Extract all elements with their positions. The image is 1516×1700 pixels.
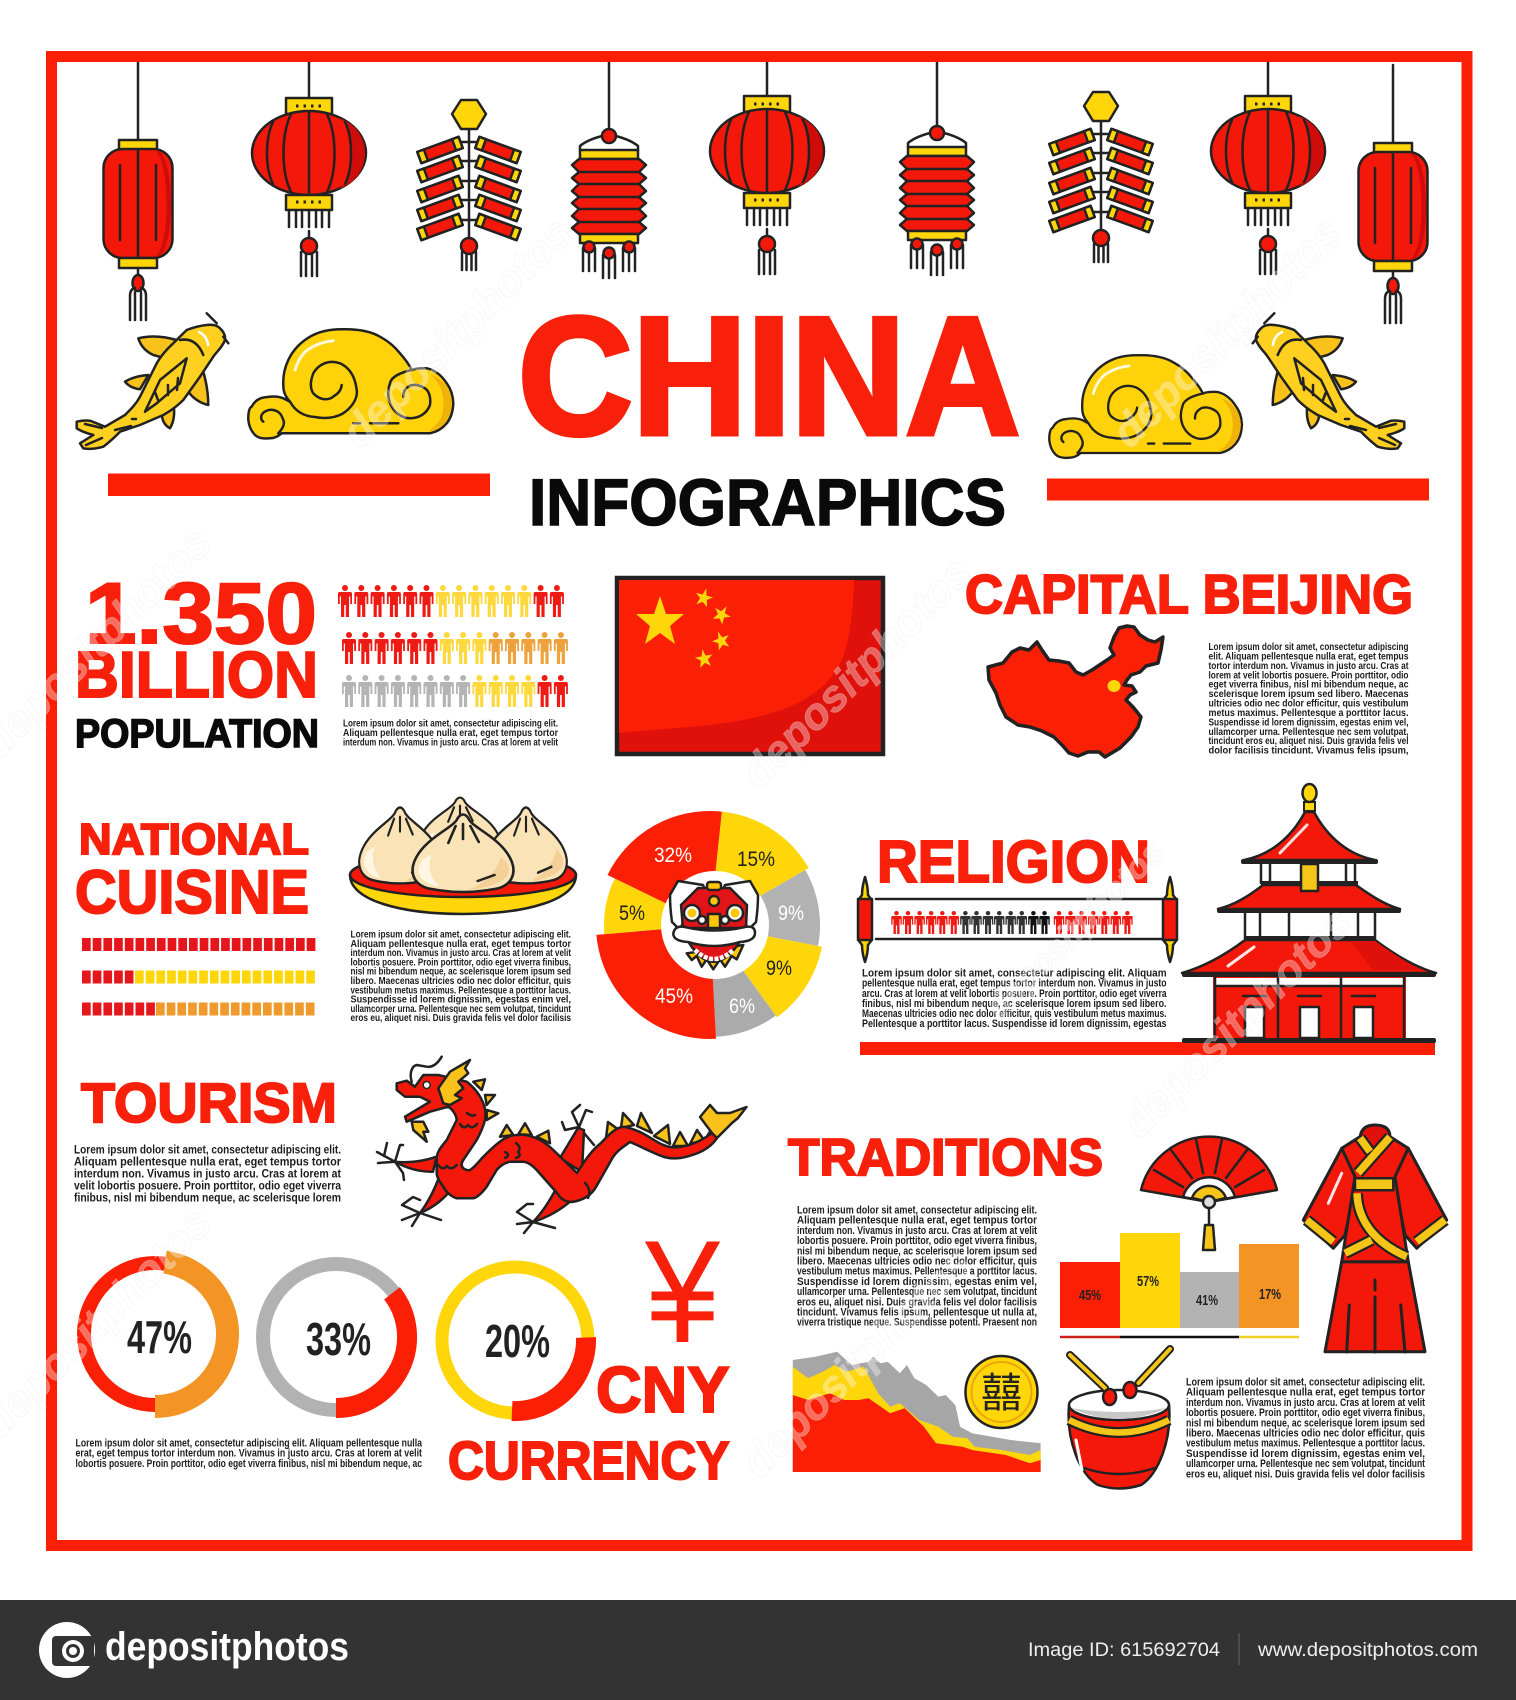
ring 47%	[84, 1262, 228, 1407]
donut labels: 9%	[766, 957, 792, 980]
drum text: Lorem ipsum dolor sit amet, consectetur adipiscing elit.	[1186, 1376, 1425, 1388]
cuisine text: eros eu, aliquet nisi. Duis gravida felis vel dolor facilisis	[350, 1013, 571, 1024]
traditions text: ullamcorper urna. Pellentesque nec sem volutpat, tincidunt	[797, 1286, 1037, 1298]
cuisine text: lobortis posuere. Proin porttitor, odio eget viverra finibus,	[350, 957, 571, 968]
icon: tall lantern right	[1358, 65, 1428, 323]
bar 17%	[1239, 1244, 1299, 1328]
icon: paper lantern left	[572, 62, 646, 278]
stock watermarks: depositphotos	[1102, 208, 1351, 457]
rings text: erat, eget tempus tortor interdum non. Vivamus in justo arcu. Cras at lorem at velit	[76, 1448, 422, 1460]
red layer	[793, 1393, 1041, 1472]
tourism text: Lorem ipsum dolor sit amet, consectetur adipiscing elit.	[74, 1142, 341, 1156]
drum text	[1186, 1376, 1426, 1480]
bar chart	[1060, 1233, 1299, 1337]
donut labels: 9%	[778, 902, 804, 925]
footer bar	[0, 1600, 1516, 1700]
tourism text: Aliquam pellentesque nulla erat, eget tempus tortor	[74, 1154, 341, 1168]
beijing marker	[1108, 680, 1120, 692]
scroll with pictograms	[858, 877, 1177, 962]
drum text: interdum non. Vivamus in justo arcu. Cras at lorem at velit	[1186, 1397, 1425, 1409]
pictogram row 1	[338, 585, 564, 617]
stock watermarks: depositphotos	[1112, 898, 1361, 1147]
tourism text: finibus, nisl mi bibendum neque, ac scelerisque lorem	[74, 1190, 341, 1204]
bar labels: 17%	[1259, 1286, 1281, 1303]
icon: tall lantern left	[104, 62, 172, 320]
religion text: Lorem ipsum dolor sit amet, consectetur adipiscing elit. Aliquam	[862, 968, 1167, 980]
drum text: Aliquam pellentesque nulla erat, eget tempus tortor	[1186, 1387, 1426, 1399]
drum text: nisl mi bibendum neque, ac scelerisque lorem ipsum sed	[1186, 1417, 1425, 1429]
stock watermarks: depositphotos	[732, 1238, 981, 1487]
icon: paper lantern right	[900, 59, 974, 275]
traditions text: vestibulum metus maximus. Pellentesque a porttitor lacus.	[797, 1266, 1037, 1278]
traditions text: viverra tristique neque. Suspendisse potenti. Praesent non	[797, 1317, 1037, 1329]
area chart	[793, 1352, 1041, 1472]
cuisine text: ullamcorper urna. Pellentesque nec sem volutpat, tincidunt	[350, 1004, 572, 1015]
icon: fan	[1141, 1137, 1277, 1250]
drum text: vestibulum metus maximus. Pellentesque a porttitor lacus.	[1186, 1438, 1425, 1450]
tourism text: interdum non. Vivamus in justo arcu. Cras at lorem at	[74, 1166, 341, 1180]
cuisine heading line 1: NATIONAL	[79, 815, 309, 864]
population label: POPULATION	[75, 712, 319, 756]
capital text: Suspendisse id lorem dignissim, egestas enim vel,	[1208, 717, 1409, 728]
icon: dumplings	[350, 798, 576, 914]
slice 5%	[604, 878, 710, 934]
bar labels: 45%	[1079, 1287, 1101, 1304]
donut labels: 32%	[654, 844, 692, 867]
ring 20%: 20%	[485, 1315, 550, 1367]
capital text: tincidunt eros eu, aliquet nisi. Duis gravida felis vel	[1208, 736, 1409, 747]
panel: tourism	[74, 1057, 746, 1233]
slice 9% yellow	[710, 925, 822, 1017]
title: CHINA: CHINA	[518, 282, 1020, 470]
bar 45%	[1060, 1262, 1120, 1328]
footer url: www.depositphotos.com	[1257, 1640, 1478, 1661]
population text: interdum non. Vivamus in justo arcu. Cras at lorem at velit	[343, 738, 559, 748]
religion text: finibus, nisl mi bibendum neque, ac scelerisque lorem ipsum sed libero.	[862, 998, 1166, 1010]
currency heading: CURRENCY	[448, 1431, 730, 1491]
traditions text: Lorem ipsum dolor sit amet, consectetur adipiscing elit.	[797, 1204, 1037, 1216]
tourism text: velit lobortis posuere. Proin porttitor, odio eget viverra	[74, 1178, 341, 1192]
icon: robe	[1303, 1125, 1447, 1352]
progress bar 2	[82, 970, 316, 984]
bar labels: 41%	[1196, 1292, 1218, 1309]
tourism text	[74, 1142, 341, 1204]
traditions text: Suspendisse id lorem dignissim, egestas enim vel,	[797, 1276, 1037, 1288]
donut labels: 6%	[729, 995, 755, 1018]
footer divider	[1238, 1633, 1240, 1665]
capital text: lorem at velit lobortis posuere. Proin porttitor, odio	[1208, 670, 1408, 681]
population text: Lorem ipsum dolor sit amet, consectetur adipiscing elit.	[343, 718, 558, 730]
cuisine text: Suspendisse id lorem dignissim, egestas enim vel,	[350, 995, 571, 1006]
ring 20%	[442, 1267, 588, 1413]
panel: population	[75, 566, 568, 756]
population text: Aliquam pellentesque nulla erat, eget tempus tortor	[343, 728, 558, 739]
icon: temple	[1182, 784, 1436, 1043]
ring 47%: 47%	[127, 1311, 192, 1363]
religion baseline bar	[860, 1042, 1435, 1055]
slice 9% gray	[710, 870, 820, 946]
cuisine text: nisl mi bibendum neque, ac scelerisque lorem ipsum sed	[350, 967, 571, 978]
donut labels: 15%	[737, 848, 775, 871]
religion text: Pellentesque a porttitor lacus. Suspendisse id lorem dignissim, egestas	[862, 1018, 1166, 1030]
bar labels: 57%	[1137, 1273, 1159, 1290]
traditions text: Aliquam pellentesque nulla erat, eget tempus tortor	[797, 1215, 1038, 1227]
drum text: lobortis posuere. Proin porttitor, odio eget viverra finibus,	[1186, 1407, 1425, 1419]
population number: 1.350	[85, 566, 317, 662]
icon: round lantern 1	[252, 62, 366, 276]
cuisine text: Lorem ipsum dolor sit amet, consectetur adipiscing elit.	[350, 930, 571, 940]
slice 45%	[596, 925, 716, 1039]
capital text: ultricies odio nec dolor efficitur, quis vestibulum	[1208, 698, 1409, 710]
lanterns row	[104, 59, 1428, 323]
slice 15%	[710, 812, 809, 925]
drum text: eros eu, aliquet nisi. Duis gravida felis vel dolor facilisis	[1186, 1468, 1425, 1480]
capital text: ullamcorper urna. Pellentesque nec sem volutpat,	[1208, 727, 1409, 738]
icon: drum	[1069, 1349, 1170, 1488]
traditions text	[797, 1204, 1038, 1329]
religion text: Maecenas ultricies odio nec dolor efficitur, quis vestibulum metus maximus.	[862, 1008, 1166, 1020]
icon: coin	[966, 1356, 1038, 1428]
cuisine text: interdum non. Vivamus in justo arcu. Cras at lorem at velit	[350, 948, 572, 959]
subtitle: INFOGRAPHICS: INFOGRAPHICS	[529, 465, 1006, 539]
ring 33%	[263, 1264, 409, 1410]
capital text: metus maximus. Pellentesque a porttitor lacus.	[1208, 708, 1409, 719]
panel: capital	[965, 563, 1413, 757]
cuisine heading line 2: CUISINE	[75, 858, 309, 926]
panel: national cuisine	[75, 798, 576, 1024]
drum text: ullamcorper urna. Pellentesque nec sem volutpat, tincidunt	[1186, 1458, 1425, 1470]
population unit: BILLION	[75, 638, 318, 711]
CNY label: CNY	[596, 1353, 730, 1426]
icon: coin: 囍	[981, 1359, 1022, 1419]
stock watermarks: depositphotos	[332, 208, 581, 457]
footer logo	[39, 1622, 95, 1678]
capital text: Lorem ipsum dolor sit amet, consectetur adipiscing	[1208, 642, 1408, 653]
china map	[988, 626, 1163, 757]
slice 6%	[710, 925, 776, 1037]
population text	[343, 718, 559, 748]
title rule left	[108, 474, 490, 496]
rings text: lobortis posuere. Proin porttitor, odio eget viverra finibus, nisl mi bibendum neque, ac	[76, 1458, 422, 1470]
gray layer	[793, 1352, 1041, 1472]
icon: cloud right	[1049, 355, 1242, 458]
pictogram row 2	[342, 632, 568, 664]
icon: firecrackers right	[1049, 92, 1153, 262]
footer image id: Image ID: 615692704	[1028, 1640, 1220, 1661]
ring 33%: 33%	[306, 1313, 371, 1365]
icon: round lantern 3	[1211, 60, 1325, 274]
donut labels: 5%	[619, 902, 645, 925]
tourism heading: TOURISM	[81, 1071, 337, 1134]
progress bar 3	[82, 1002, 316, 1016]
panel: religion	[858, 784, 1436, 1055]
icon: round lantern 2	[710, 60, 824, 274]
rings text	[76, 1438, 423, 1470]
capital text: scelerisque lorem ipsum sed libero. Maecenas	[1208, 689, 1409, 700]
capital text: eget viverra finibus, nisl mi bibendum neque, ac	[1208, 680, 1409, 691]
religion text	[862, 968, 1167, 1030]
stock watermarks	[0, 208, 1361, 1487]
title rule right	[1047, 478, 1429, 500]
icon: koi fish right	[1253, 313, 1404, 449]
progress bar 1	[82, 938, 316, 951]
religion text: arcu. Cras at lorem at velit lobortis posuere. Proin porttitor, odio eget viverra	[862, 988, 1167, 1000]
capital text	[1208, 642, 1409, 757]
footer brand: depositphotos	[105, 1625, 349, 1669]
icon: lion head	[670, 881, 758, 969]
panel: flag	[617, 578, 883, 754]
traditions heading: TRADITIONS	[788, 1129, 1103, 1187]
donut labels	[619, 844, 804, 1018]
religion text: pellentesque nulla erat, eget tempus tortor interdum non. Vivamus in justo	[862, 978, 1167, 990]
traditions text: lobortis posuere. Proin porttitor, odio eget viverra finibus,	[797, 1235, 1037, 1247]
drum text: Suspendisse id lorem dignissim, egestas enim vel,	[1186, 1448, 1425, 1460]
flag small stars	[693, 586, 734, 668]
bar 41%	[1180, 1272, 1239, 1328]
cuisine text: vestibulum metus maximus. Pellentesque a porttitor lacus.	[350, 985, 571, 996]
capital text: elit. Aliquam pellentesque nulla erat, eget tempus	[1208, 651, 1409, 662]
pictogram row 3	[342, 675, 568, 707]
donut hole	[661, 871, 769, 979]
cuisine text: Aliquam pellentesque nulla erat, eget tempus tortor	[350, 939, 571, 950]
bar 57%	[1120, 1233, 1180, 1328]
icon: cloud left	[248, 329, 453, 439]
flag big star	[636, 596, 684, 644]
icon: firecrackers left	[417, 100, 521, 270]
cuisine text: libero. Maecenas ultricies odio nec dolor efficitur, quis	[350, 976, 571, 987]
stock watermarks: depositphotos	[732, 548, 981, 797]
panel: percentage rings	[76, 1262, 588, 1470]
icon: koi fish left	[77, 313, 228, 449]
capital text: dolor facilisis tincidunt. Vivamus felis ipsum,	[1208, 746, 1409, 757]
yen symbol: ¥	[644, 1210, 721, 1373]
rings text: Lorem ipsum dolor sit amet, consectetur adipiscing elit. Aliquam pellentesque nulla	[76, 1438, 423, 1450]
traditions text: tincidunt. Vivamus felis ipsum, pellentesque ut nulla at,	[797, 1306, 1037, 1318]
traditions text: libero. Maecenas ultricies odio nec dolor efficitur, quis	[797, 1256, 1037, 1268]
bar labels	[1079, 1273, 1281, 1309]
bar chart underline	[1060, 1336, 1120, 1338]
traditions text: interdum non. Vivamus in justo arcu. Cras at lorem at velit	[797, 1225, 1037, 1237]
donut chart	[596, 811, 822, 1039]
donut labels: 45%	[655, 985, 693, 1008]
cuisine text	[350, 930, 572, 1024]
icon: dragon	[377, 1057, 746, 1233]
traditions text: eros eu, aliquet nisi. Duis gravida felis vel dolor facilisis	[797, 1296, 1037, 1308]
capital heading: CAPITAL BEIJING	[965, 563, 1413, 625]
slice 32%	[608, 811, 722, 925]
panel: traditions	[788, 1125, 1447, 1488]
traditions text: nisl mi bibendum neque, ac scelerisque lorem ipsum sed	[797, 1245, 1037, 1257]
capital text: tortor interdum non. Vivamus in justo arcu. Cras at	[1208, 661, 1409, 672]
religion heading: RELIGION	[877, 829, 1150, 895]
panel: currency	[448, 1210, 730, 1491]
yellow layer	[793, 1365, 1041, 1472]
drum text: libero. Maecenas ultricies odio nec dolor efficitur, quis	[1186, 1428, 1425, 1440]
stock watermarks: depositphotos	[979, 833, 1171, 1026]
